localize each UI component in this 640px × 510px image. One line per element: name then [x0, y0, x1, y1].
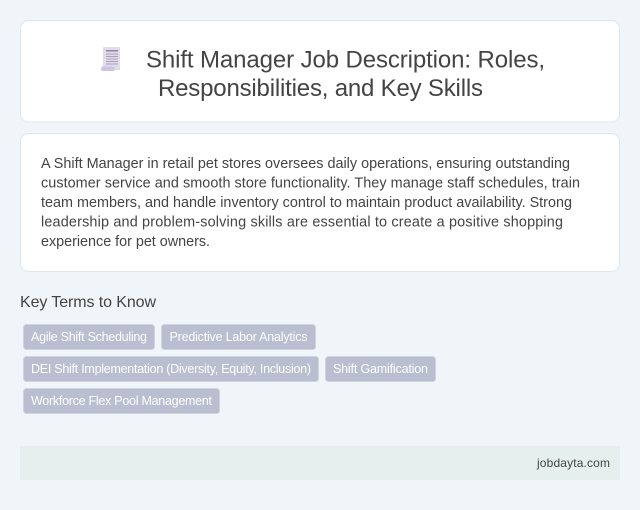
title: [146, 46, 545, 102]
heading: key terms: Key Terms to Know: [20, 294, 156, 311]
description text: experience for pet owners.: [41, 234, 210, 250]
tag: Workforce Flex Pool Management: [24, 388, 220, 414]
tag: DEI Shift Implementation: DEI Shift Implementation (Diversity, Equity, Inclusion): [31, 362, 311, 376]
description text: customer service and smooth store functionality. They manage staff schedules, train: [41, 176, 580, 192]
panel: title header: [20, 20, 620, 122]
title: Shift Manager Job Description: Roles,: [146, 46, 545, 74]
tag: Agile Shift Scheduling: Agile Shift Scheduling: [31, 330, 147, 344]
tag: Predictive Labor Analytics: [162, 324, 316, 350]
tag: Workforce Flex Pool Management: Workforce Flex Pool Management: [31, 394, 213, 408]
tag: Shift Gamification: Shift Gamification: [333, 362, 428, 376]
tag: DEI Shift Implementation: [24, 356, 318, 382]
description text: leadership and problem-solving skills are essential to create a positive shopping: [41, 214, 563, 230]
tag: Agile Shift Scheduling: [24, 324, 154, 350]
tag group: key terms: [24, 324, 436, 414]
title: Responsibilities, and Key Skills: [158, 75, 483, 102]
description text: A Shift Manager in retail pet stores oversees daily operations, ensuring outstanding: [41, 156, 570, 172]
footer bar: jobdayta.com: [536, 456, 610, 470]
tag: Predictive Labor Analytics: Predictive Labor Analytics: [170, 330, 308, 344]
description text: [41, 156, 580, 250]
panel: description: [20, 134, 620, 272]
footer bar: [20, 446, 620, 480]
tag: Shift Gamification: [326, 356, 436, 382]
description text: team members, and handle inventory control to maintain product availability. Strong: [41, 195, 572, 211]
icon: document scroll: [101, 47, 120, 71]
